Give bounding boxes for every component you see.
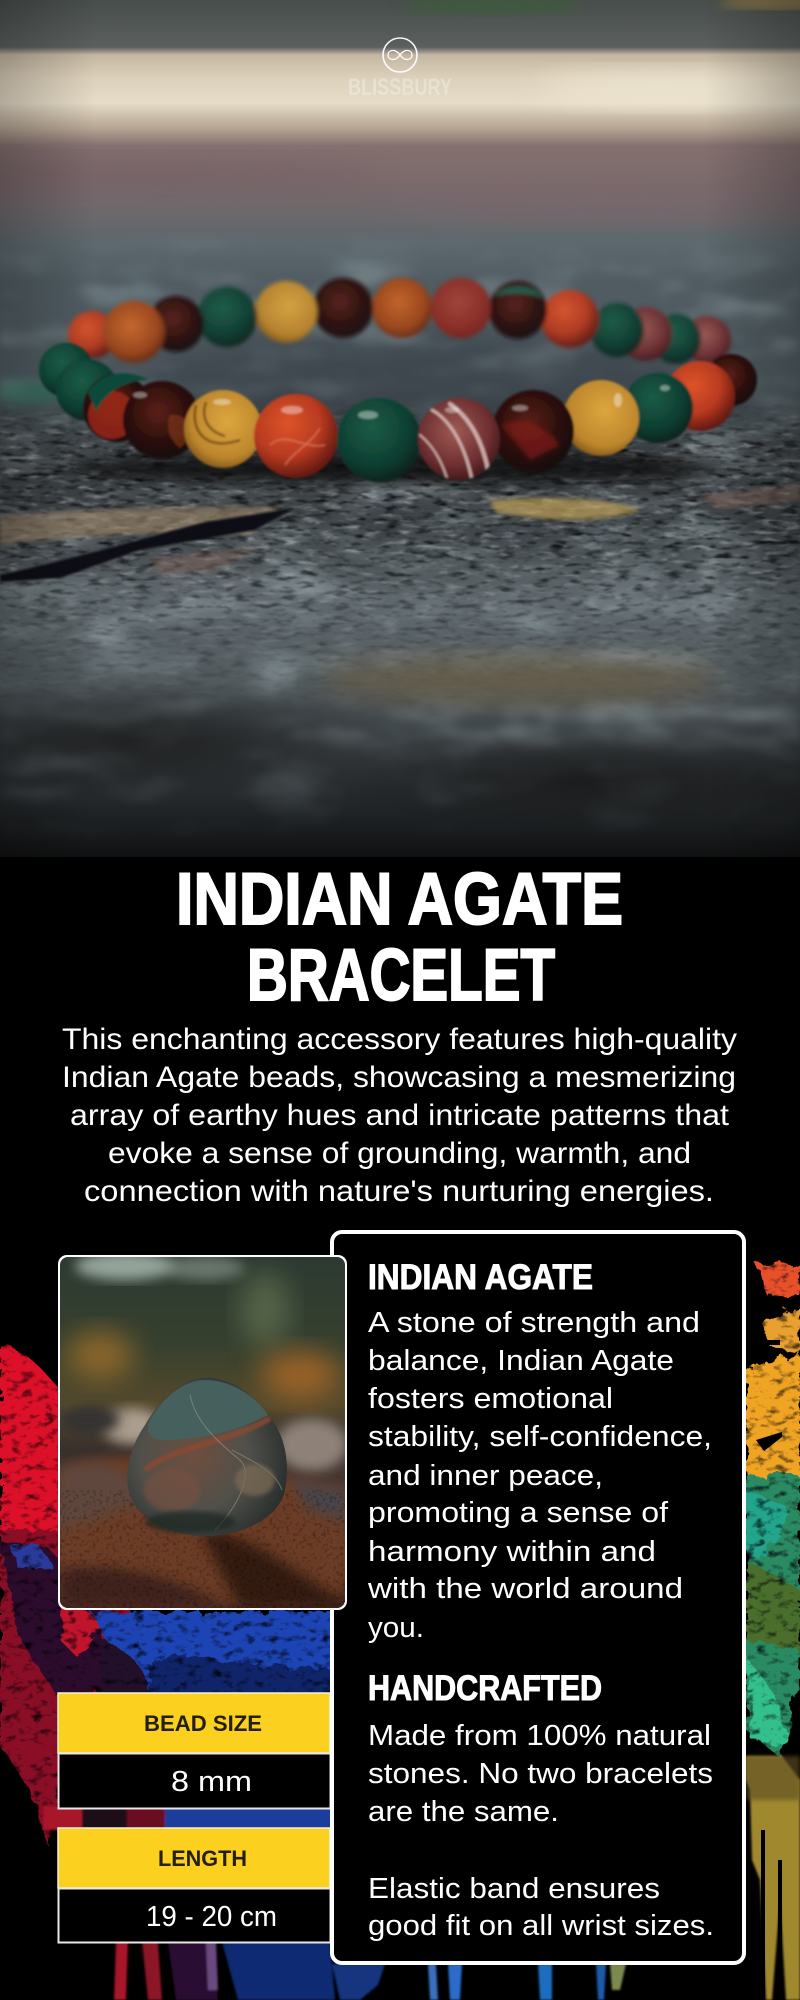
body: Handcrafted description: stones. No two bracelets	[368, 1758, 713, 1790]
heading: Handcrafted: HANDCRAFTED	[368, 1669, 602, 1708]
heading: Indian Agate: INDIAN AGATE	[368, 1258, 593, 1297]
spec table: bead size	[58, 1693, 330, 1808]
body: Indian Agate description: promoting a sense of	[368, 1497, 669, 1529]
info panel	[332, 1232, 744, 1963]
description paragraph: array of earthy hues and intricate patterns that	[70, 1099, 730, 1132]
description paragraph: Indian Agate beads, showcasing a mesmerizing	[62, 1061, 736, 1094]
title	[176, 859, 623, 1016]
spec table: bead size: BEAD SIZE	[144, 1711, 262, 1736]
title: INDIAN AGATE	[176, 859, 623, 940]
description paragraph: connection with nature's nurturing energies.	[84, 1175, 714, 1208]
bracelet: front row of beads	[39, 343, 757, 482]
body: Indian Agate description	[367, 1307, 712, 1644]
stone photo panel	[58, 1252, 348, 1610]
body: Indian Agate description: harmony within and	[368, 1536, 656, 1568]
body: Handcrafted description: Elastic band ensures	[368, 1873, 660, 1905]
logo: infinity circle mark	[383, 38, 417, 72]
spec table: length: LENGTH	[158, 1846, 247, 1871]
body: Indian Agate description: and inner peace,	[368, 1460, 603, 1492]
bracelet: back row of beads	[68, 278, 731, 364]
body: Indian Agate description: balance, Indian Agate	[368, 1345, 674, 1377]
body: Handcrafted description: good fit on all wrist sizes.	[368, 1910, 714, 1942]
body: Handcrafted description: are the same.	[368, 1796, 559, 1828]
paint strip between spec rows	[43, 1806, 332, 1830]
spec table: length	[58, 1828, 330, 1942]
spec table: length: 19 - 20 cm	[146, 1901, 277, 1933]
description paragraph: This enchanting accessory features high-quality	[62, 1023, 737, 1056]
body: Indian Agate description: A stone of strength and	[368, 1307, 700, 1339]
body: Indian Agate description: stability, self-confidence,	[368, 1421, 712, 1453]
paint drips: bottom	[114, 1942, 626, 2000]
description paragraph	[62, 1023, 737, 1208]
hero photo: bracelet on stone	[0, 0, 800, 857]
body: Indian Agate description: you.	[368, 1612, 424, 1644]
body: Handcrafted description	[368, 1720, 714, 1942]
paint splash: right orange, teal and yellow	[746, 1264, 800, 2000]
paint splash: left red and blue	[0, 1349, 340, 1846]
description paragraph: evoke a sense of grounding, warmth, and	[108, 1137, 691, 1170]
body: Indian Agate description: with the world around	[367, 1573, 683, 1605]
logo wordmark: BLISSBURY	[348, 74, 452, 101]
body: Indian Agate description: fosters emotional	[368, 1383, 613, 1415]
body: Handcrafted description: Made from 100% natural	[368, 1720, 711, 1752]
title: BRACELET	[247, 935, 555, 1016]
agate stone	[127, 1378, 287, 1536]
spec table: bead size: 8 mm	[171, 1766, 252, 1798]
